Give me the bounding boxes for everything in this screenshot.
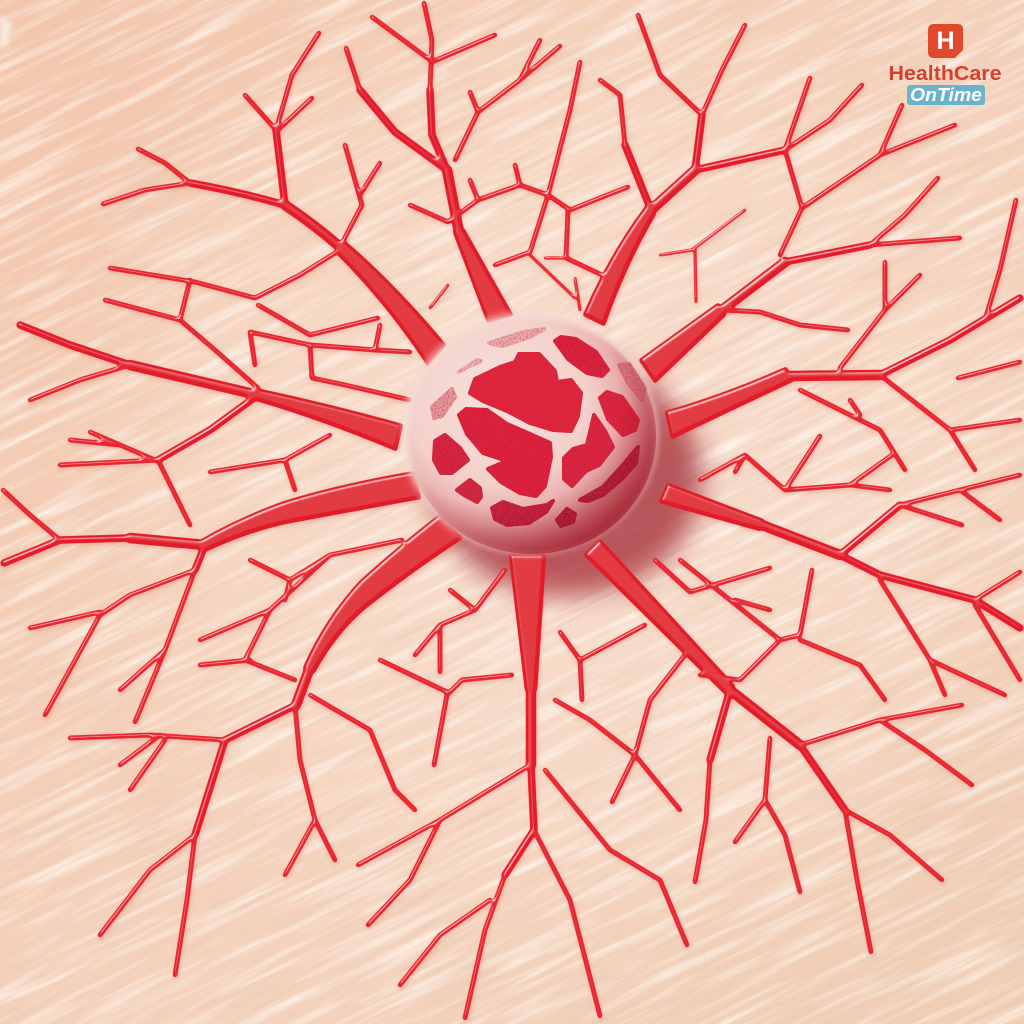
logo tag: OnTime xyxy=(910,85,982,105)
branch: lower left xyxy=(70,515,462,975)
branch: right upper xyxy=(640,178,960,382)
branch: top xyxy=(346,3,560,322)
capillaries: right xyxy=(700,436,892,490)
lesion: central nodule xyxy=(403,313,657,554)
branch: upper right xyxy=(584,15,955,325)
capillaries: lower centre xyxy=(380,570,512,765)
logo wordmark: HealthCare xyxy=(888,63,1002,85)
capillaries: lower right xyxy=(555,560,885,810)
nodule: red cells xyxy=(432,329,645,526)
soft shadow around lesion xyxy=(430,360,702,596)
branch: lower right xyxy=(660,475,1020,695)
branch: left upper xyxy=(20,280,402,525)
capillaries: left lower xyxy=(200,540,402,680)
branch: right xyxy=(666,200,1020,470)
branch: upper left xyxy=(103,33,445,365)
capillaries: left upper xyxy=(210,305,410,490)
branch: bottom right xyxy=(585,540,972,952)
logo icon: H xyxy=(936,27,955,55)
branch: bottom xyxy=(358,555,687,1018)
capillaries: top centre xyxy=(410,62,628,310)
logo: HealthCare OnTime xyxy=(888,24,1002,105)
branch: left lower xyxy=(3,472,420,722)
